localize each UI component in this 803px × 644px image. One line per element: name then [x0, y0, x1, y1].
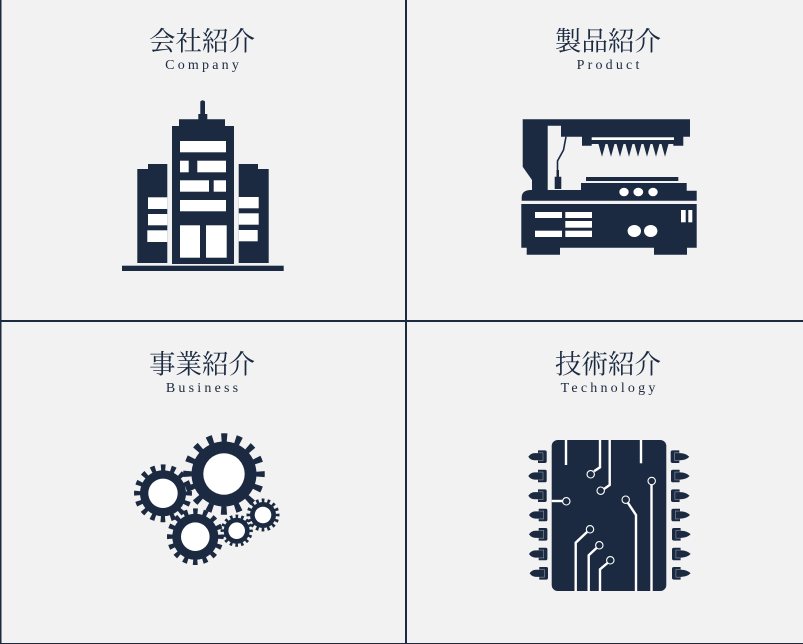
icon: gears [137, 438, 278, 562]
heading: business [149, 350, 255, 396]
icon: circuit chip [528, 440, 691, 591]
panel: business [137, 350, 278, 562]
heading: technology [555, 350, 661, 396]
heading: technology: 技術紹介 [555, 350, 661, 380]
chip pins: left [528, 450, 548, 580]
chip pins: right [671, 450, 691, 580]
icon: manufacturing machine [521, 119, 697, 255]
heading: product [555, 26, 661, 73]
heading: company: Company [165, 58, 242, 73]
heading: technology: Technology [561, 381, 659, 396]
panel: technology [528, 350, 691, 591]
heading: business: 事業紹介 [149, 350, 255, 380]
heading: business: Business [166, 381, 241, 396]
heading: product: Product [577, 58, 643, 73]
icon: office buildings [122, 100, 284, 271]
heading: company [149, 26, 255, 73]
panel: product [521, 26, 697, 255]
panel: company [122, 26, 284, 271]
heading: product: 製品紹介 [555, 26, 661, 56]
heading: company: 会社紹介 [149, 26, 255, 56]
